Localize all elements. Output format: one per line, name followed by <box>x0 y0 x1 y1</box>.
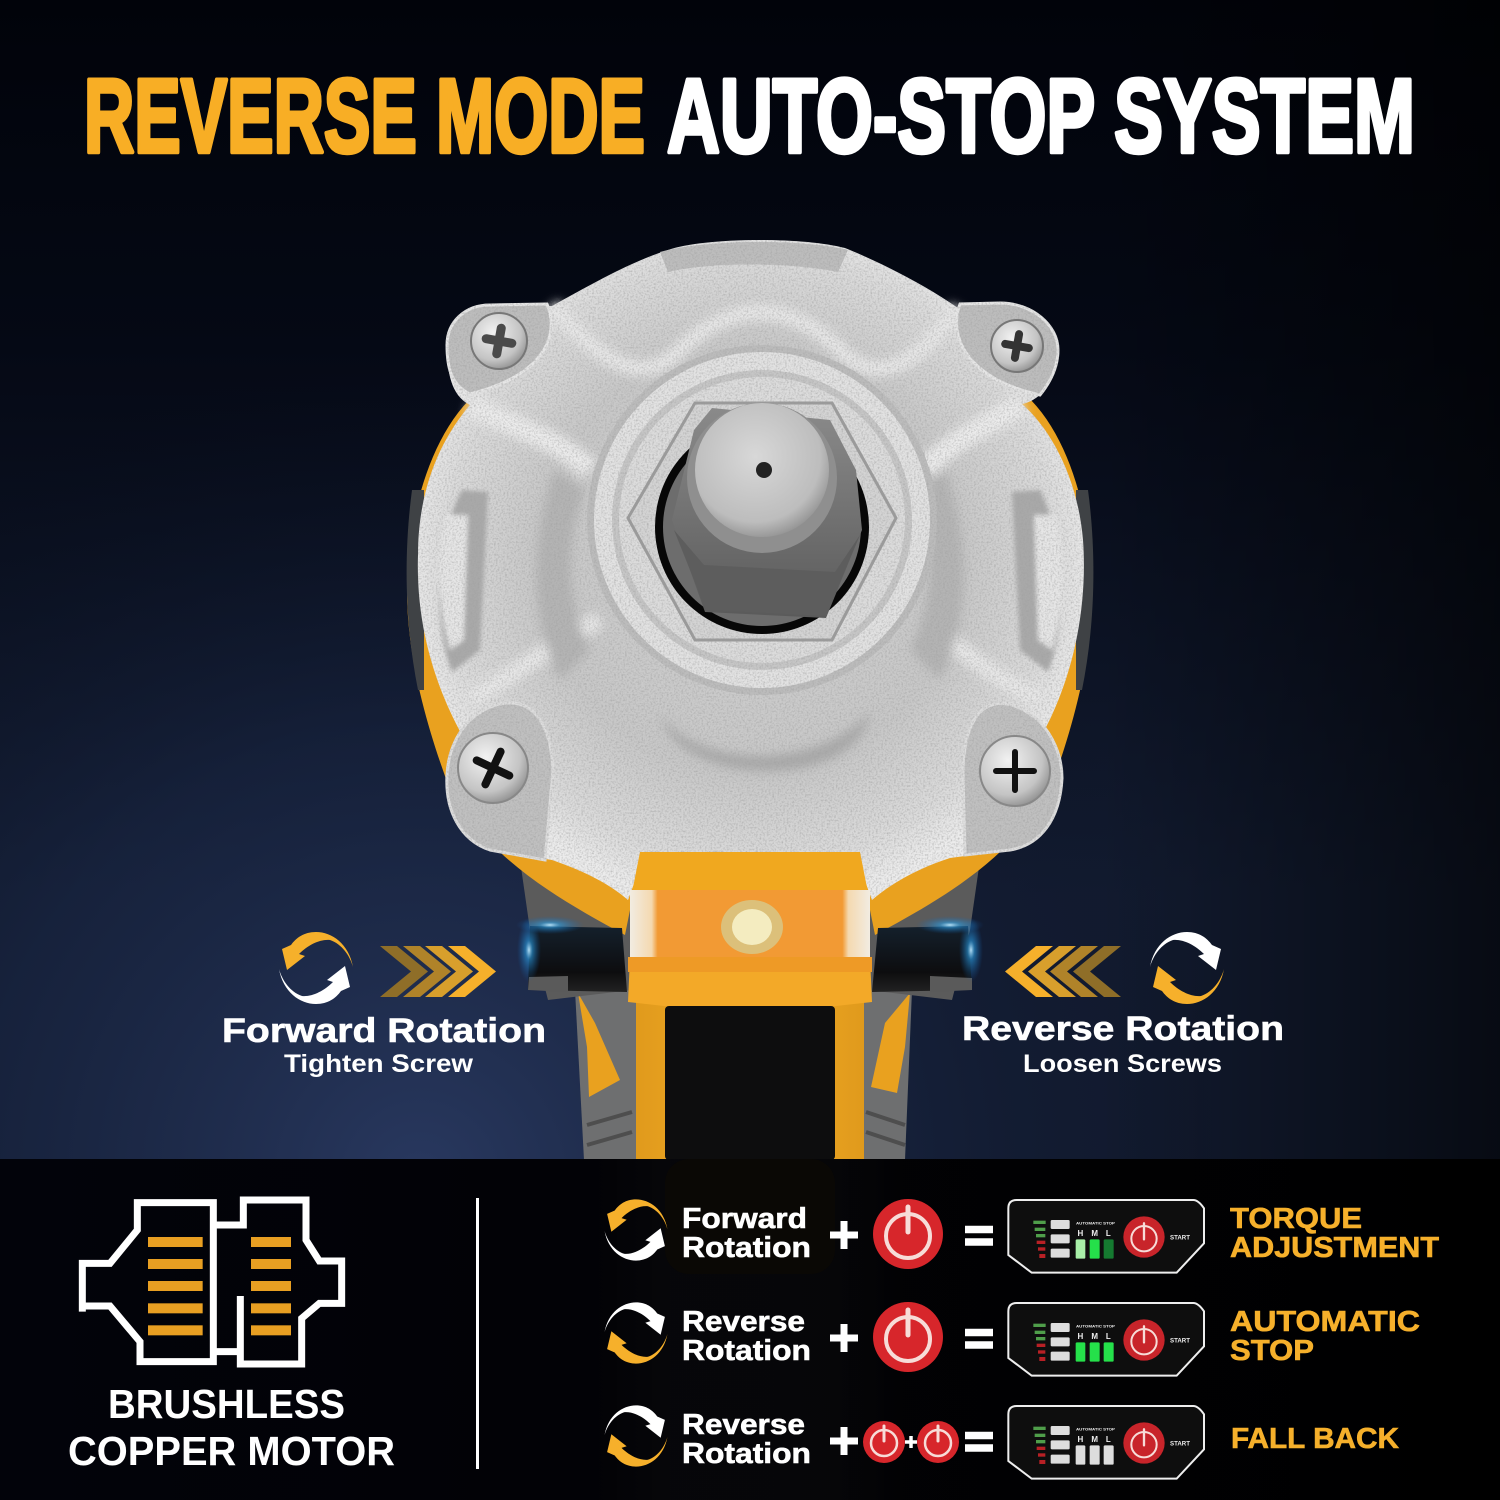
loosen screws label: Loosen Screws <box>1023 1050 1222 1078</box>
icon: motor <box>82 1200 342 1364</box>
tighten screw label: Tighten Screw <box>284 1050 474 1078</box>
motor label line two: COPPER MOTOR <box>68 1428 395 1474</box>
motor label line one: BRUSHLESS <box>108 1381 345 1427</box>
equals <box>965 1332 993 1345</box>
equals <box>965 1436 993 1448</box>
forward rotation callout <box>222 932 546 1078</box>
control panel display: START <box>1170 1338 1190 1344</box>
right direction switch <box>872 916 984 992</box>
icon: power button <box>873 1302 943 1372</box>
automatic stop text <box>1230 1306 1420 1367</box>
control panel display: L <box>1106 1435 1111 1444</box>
control panel display: AUTOMATIC STOP <box>1076 1221 1115 1226</box>
divider <box>476 1198 479 1469</box>
reverse rotation text: Reverse <box>682 1306 805 1338</box>
reverse rotation callout <box>962 932 1284 1078</box>
torque adjustment text <box>1230 1203 1439 1264</box>
panel: brushless copper motor <box>68 1200 395 1474</box>
left direction switch <box>516 916 627 992</box>
screw bottom right <box>980 736 1050 806</box>
wrench handle and lower body <box>575 975 912 1160</box>
control panel display <box>1008 1303 1204 1376</box>
wrench drive anvil <box>655 403 869 634</box>
panel: bottom feature bar <box>0 1159 1500 1500</box>
control panel display: H <box>1077 1435 1083 1444</box>
control panel display: H <box>1077 1332 1083 1341</box>
equals <box>965 1230 993 1242</box>
row: torque adjustment <box>605 1199 1439 1273</box>
wrench rear yellow housing <box>407 390 1093 1000</box>
icon: reverse rotation <box>605 1405 667 1467</box>
icon: double power buttons <box>863 1421 959 1463</box>
screw bosses <box>447 303 1062 860</box>
wrench silver casting <box>418 240 1084 900</box>
forward rotation text: Rotation <box>682 1232 811 1264</box>
title <box>84 58 1415 175</box>
control panel display: L <box>1106 1229 1111 1238</box>
control panel display: M <box>1091 1229 1098 1238</box>
row: fall back <box>605 1405 1399 1479</box>
icon: reverse rotation <box>605 1302 667 1364</box>
control panel display: START <box>1170 1235 1190 1241</box>
arrow: chevrons left <box>1005 946 1121 997</box>
reverse rotation text: Rotation <box>682 1335 811 1367</box>
impact wrench front view <box>407 240 1093 1160</box>
control panel display: M <box>1091 1435 1098 1444</box>
icon: forward rotation <box>605 1199 667 1261</box>
fall back text: FALL BACK <box>1231 1423 1399 1455</box>
arrow: chevrons right <box>380 946 496 997</box>
side recesses <box>439 490 1062 672</box>
control panel display <box>1008 1406 1204 1479</box>
control panel display: L <box>1106 1332 1111 1341</box>
work light collar <box>628 852 872 1006</box>
forward rotation text <box>682 1203 811 1264</box>
screw top left <box>471 313 527 369</box>
plus <box>830 1221 858 1249</box>
control panel display: START <box>1170 1441 1190 1447</box>
screw bottom left <box>458 733 528 803</box>
torque adjustment text: ADJUSTMENT <box>1230 1232 1439 1264</box>
icon: reverse rotation arrows <box>1150 932 1224 1004</box>
background <box>0 0 1500 1160</box>
icon: power button <box>873 1199 943 1269</box>
automatic stop text: AUTOMATIC <box>1230 1306 1420 1338</box>
reverse rotation text <box>682 1306 811 1367</box>
reverse rotation label: Reverse Rotation <box>962 1010 1284 1048</box>
torque adjustment text: TORQUE <box>1230 1203 1362 1235</box>
title: REVERSE MODE <box>84 58 645 175</box>
plus <box>830 1324 858 1352</box>
screw top right <box>991 320 1043 372</box>
plus <box>830 1427 858 1455</box>
control panel display: AUTOMATIC STOP <box>1076 1427 1115 1432</box>
reverse rotation text <box>682 1409 811 1470</box>
control panel display: M <box>1091 1332 1098 1341</box>
reverse rotation text: Reverse <box>682 1409 805 1441</box>
reverse rotation text: Rotation <box>682 1438 811 1470</box>
control panel display <box>1008 1200 1204 1273</box>
forward rotation label: Forward Rotation <box>222 1012 546 1050</box>
row: automatic stop <box>605 1302 1420 1376</box>
shading bands on casting <box>470 306 1040 771</box>
control panel display: H <box>1077 1229 1083 1238</box>
forward rotation text: Forward <box>682 1203 807 1235</box>
control panel display: AUTOMATIC STOP <box>1076 1324 1115 1329</box>
icon: forward rotation arrows <box>279 932 353 1004</box>
automatic stop text: STOP <box>1230 1335 1314 1367</box>
